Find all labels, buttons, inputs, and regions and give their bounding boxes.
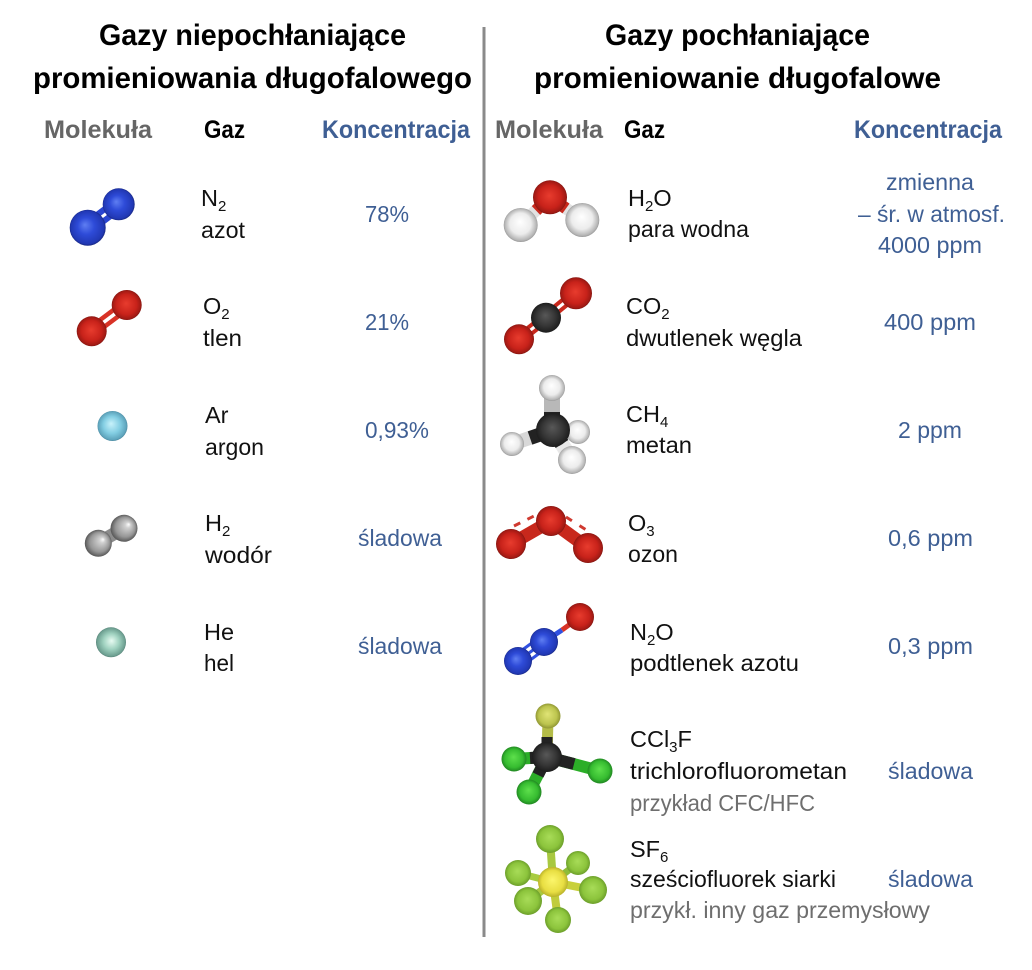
column heading: molecule: Molekuła — [495, 116, 604, 144]
gas label: CCl3F: trichlorofluorometan — [630, 758, 847, 784]
title: absorbing gases — [534, 19, 941, 95]
gas label: H2O: O — [653, 185, 672, 211]
gas label: O2: 2 — [221, 306, 230, 323]
gas label: Ar: argon — [205, 434, 264, 460]
gas label: O3: ozon — [628, 541, 678, 567]
concentration: CCl3F: śladowa — [888, 758, 974, 784]
gas label: SF6: przykł. inny gaz przemysłowy — [630, 897, 930, 923]
title: non-absorbing gases: promieniowania długofalowego — [33, 62, 472, 95]
gas label: CO2: dwutlenek węgla — [626, 325, 803, 351]
divider between panels — [482, 27, 486, 937]
gas label: O3: O — [628, 510, 646, 536]
gas label: H2: H — [205, 510, 222, 536]
gas label: CCl3F: F — [678, 726, 692, 752]
panel: absorbing gases — [495, 19, 1005, 933]
column heading: concentration: Koncentracja — [854, 116, 1003, 144]
gas label: H2O — [628, 185, 750, 242]
gas label: H2O: H — [628, 185, 645, 211]
gas label: CH4: metan — [626, 432, 692, 458]
icon: Ar atom — [98, 411, 128, 441]
gas label: Ar: Ar — [205, 402, 229, 428]
icon: CO2 molecule — [504, 277, 592, 354]
gas label: CO2: CO — [626, 293, 661, 319]
concentration: N2: 78% — [365, 201, 409, 227]
concentration: H2O: – śr. w atmosf. — [858, 201, 1005, 227]
concentration: H2O: 4000 ppm — [878, 232, 982, 258]
gas label: CCl3F: przykład CFC/HFC — [630, 790, 815, 816]
column heading: gas: Gaz — [624, 116, 665, 144]
gas label: N2O: podtlenek azotu — [630, 650, 799, 676]
icon: H2O molecule — [504, 180, 599, 242]
gas label: N2O: N — [630, 619, 647, 645]
gas label: SF6: sześciofluorek siarki — [630, 866, 836, 892]
title: absorbing gases: Gazy pochłaniające — [605, 19, 870, 52]
icon: SF6 molecule — [505, 825, 607, 933]
gas label: N2 — [201, 185, 245, 243]
gas label: CO2 — [626, 293, 803, 351]
icon: He atom — [96, 627, 126, 657]
gas label: N2O — [630, 619, 799, 676]
concentration: H2O: zmienna — [886, 169, 975, 195]
gas label: CCl3F: 3 — [669, 739, 678, 756]
gas label: H2O: 2 — [645, 198, 653, 215]
icon: O2 molecule — [77, 290, 142, 346]
title: non-absorbing gases — [33, 19, 472, 95]
concentration: CH4: 2 ppm — [898, 417, 962, 443]
concentration: O2: 21% — [365, 309, 409, 335]
gas label: O3: 3 — [646, 523, 655, 540]
gas label: N2O: O — [655, 619, 674, 645]
gas label: N2O: 2 — [647, 632, 655, 649]
title: absorbing gases: promieniowanie długofalowe — [534, 62, 941, 95]
gas label: O3 — [628, 510, 678, 567]
gas label: N2: N — [201, 185, 218, 211]
gas label: O2: O — [203, 293, 221, 319]
concentration: SF6: śladowa — [888, 866, 974, 892]
gas label: N2: 2 — [218, 198, 226, 215]
column heading: gas: Gaz — [204, 116, 245, 144]
gas label: CCl3F — [630, 726, 847, 816]
gas label: He — [204, 619, 234, 676]
title: non-absorbing gases: Gazy niepochłaniające — [99, 19, 406, 52]
gas label: CCl3F: CCl — [630, 726, 669, 752]
gas label: H2: wodór — [204, 542, 272, 568]
column heading: concentration: Koncentracja — [322, 116, 471, 144]
concentration: H2O — [858, 169, 1005, 258]
gas label: CH4: 4 — [660, 414, 668, 431]
concentration: N2O: 0,3 ppm — [888, 633, 973, 659]
panel: non-absorbing gases — [33, 19, 472, 676]
concentration: O3: 0,6 ppm — [888, 525, 973, 551]
concentration: He: śladowa — [358, 633, 443, 659]
gas label: H2 — [204, 510, 272, 568]
concentration: Ar: 0,93% — [365, 417, 429, 443]
icon: CH4 molecule — [500, 375, 590, 474]
concentration: CO2: 400 ppm — [884, 309, 976, 335]
gas label: O2 — [203, 293, 242, 351]
gas label: CO2: 2 — [661, 306, 670, 323]
gas label: He: He — [204, 619, 234, 645]
gas label: SF6: 6 — [660, 849, 668, 866]
gas label: Ar — [205, 402, 264, 460]
gas label: H2: 2 — [222, 523, 230, 540]
concentration: H2: śladowa — [358, 525, 443, 551]
gas label: SF6 — [630, 836, 930, 923]
icon: N2 molecule — [70, 188, 135, 246]
gas label: O2: tlen — [203, 325, 242, 351]
gas label: CH4 — [626, 401, 692, 458]
column heading: molecule: Molekuła — [44, 116, 153, 144]
gas label: SF6: SF — [630, 836, 660, 862]
icon: H2 molecule — [85, 515, 138, 557]
icon: O3 molecule — [496, 506, 603, 563]
icon: CCl3F molecule — [502, 704, 612, 804]
gas label: N2: azot — [201, 217, 245, 243]
gas label: He: hel — [204, 650, 234, 676]
icon: N2O molecule — [504, 603, 594, 675]
gas label: H2O: para wodna — [628, 216, 750, 242]
gas label: CH4: CH — [626, 401, 660, 427]
